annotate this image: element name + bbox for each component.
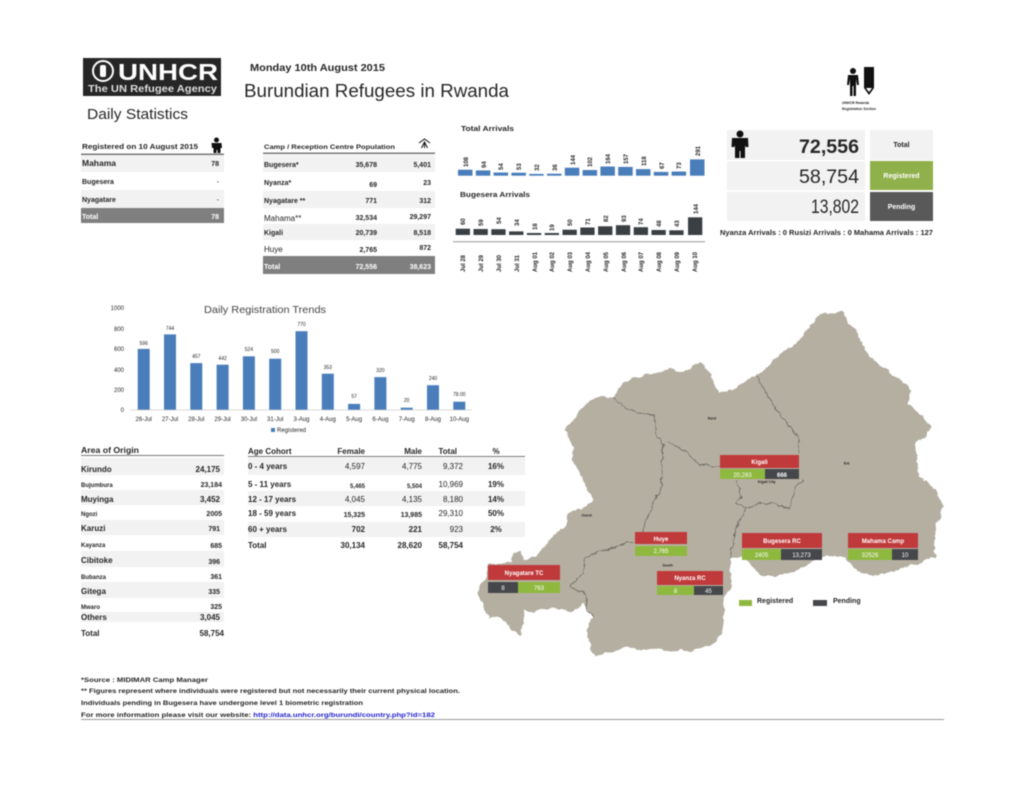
panel: camp population: Mahama** [264,214,301,223]
table: age cohort: Total [248,541,267,550]
map: province labels [581,416,850,567]
chart: bugesera arrivals: 54 [497,217,503,224]
panel: registered on 10 August: 78 [211,214,219,221]
map legend [739,598,861,606]
chart axis with dates: Aug 08 [657,251,663,272]
panel: totals: 58,754 [799,167,859,188]
panel: camp population: 5,401 [413,162,431,169]
chart: total arrivals: 53 [517,163,523,170]
heading: registered table: Registered on 10 August 2015 [82,144,198,151]
title: Burundian Refugees in Rwanda [244,81,510,101]
panel: totals: Pending [888,204,915,211]
table: area of origin: 58,754 [200,629,225,638]
chart: daily registration trends: 7-Aug [399,417,415,423]
table: age cohort: 4,597 [345,462,366,471]
panel: camp population: Huye [264,245,283,254]
table: area of origin: 2005 [206,511,222,518]
map: province labels: Nord [708,416,716,420]
table: area of origin: Bujumbura [81,483,113,489]
table: area of origin: 396 [208,559,220,566]
table: age cohort: 702 [352,525,366,534]
panel: camp population: 38,623 [410,264,431,271]
chart: daily registration trends: 600 [114,347,125,353]
chart: daily registration trends: 240 [429,376,437,382]
chart axis with dates: Jul 29 [479,254,485,272]
footnotes: Individuals pending in Bugesera have undergone level 1 biometric registration [81,701,363,707]
chart axis with dates: Aug 09 [675,251,681,272]
table: age cohort: 19% [488,480,504,489]
chart: daily registration trends [111,304,472,434]
table: age cohort: 58,754 [439,541,464,550]
chart: total arrivals: 108 [464,156,470,167]
chart: total arrivals: 102 [588,156,594,167]
callout: Nyagatare TC: 763 [534,586,545,592]
panel: camp population: 29,297 [410,214,431,221]
table: age cohort: 13,985 [401,512,422,519]
callout: Huye: 2,765 [653,549,669,555]
callout: Kigali: 20,283 [733,473,752,479]
chart axis with dates: Aug 05 [604,251,610,272]
chart: bugesera arrivals: 50 [568,219,574,226]
icon: registration section [842,67,876,111]
panel: registered on 10 August: 78 [211,161,219,168]
table: age cohort [248,447,525,550]
table: area of origin: 685 [210,543,222,550]
footnotes: ** Figures represent where individuals were registered but not necessarily their current physical location. [81,689,460,695]
chart: daily registration trends: 596 [140,341,148,347]
chart: daily registration trends: 500 [271,349,280,355]
chart: daily registration trends: 5-Aug [346,417,362,423]
panel: totals: Registered [883,173,920,180]
table: age cohort: 28,620 [398,541,423,550]
chart axis with dates: Jul 31 [515,254,521,272]
chart: bugesera arrivals: 59 [479,219,485,226]
table: age cohort: 5 - 11 years [248,480,292,489]
panel: camp population: 23 [423,180,431,187]
callout: Nyanza RC: Nyanza RC [674,576,706,582]
panel: camp population: 20,739 [356,230,377,237]
chart: daily registration trends: 0 [121,408,125,414]
table: age cohort: 60 + years [248,525,287,534]
table: area of origin: Bubanza [81,575,107,581]
callout: Kigali: Kigali [751,460,768,466]
chart: daily registration trends: 800 [114,327,125,333]
chart: total arrivals: 54 [499,163,505,170]
chart axis with dates: Jul 30 [497,254,503,272]
callout: Huye: Huye [654,537,669,543]
footnotes: *Source : MIDIMAR Camp Manager [81,678,209,684]
chart: daily registration trends: 27-Jul [162,417,178,423]
table: age cohort: 10,969 [439,480,464,489]
chart axis with dates: Aug 01 [533,251,539,272]
table: age cohort: 15,325 [344,512,365,519]
callout: Huye [635,532,687,556]
table: age cohort: 4,775 [402,462,423,471]
heading: camp table: Camp / Reception Centre Population [264,145,395,151]
chart: total arrivals: 94 [482,161,488,168]
chart: daily registration trends: 26-Jul [136,417,152,423]
chart: bugesera arrivals: 19 [550,224,556,231]
panel: registered on 10 August: Bugesera [82,179,114,186]
panel: camp population: 72,556 [356,264,377,271]
heading: bugesera arrivals: Bugesera Arrivals [460,192,530,199]
panel: registered on 10 August: - [217,179,220,186]
map: province labels: Est [844,462,850,466]
chart: bugesera arrivals: 43 [675,220,681,227]
panel: camp population: Nyagatare ** [264,198,306,205]
chart: bugesera arrivals: 93 [622,215,628,222]
heading: daily registration trends: Daily Registration Trends [204,304,326,316]
callout: Nyagatare TC [488,565,560,593]
chart: daily registration trends: 200 [114,388,125,394]
chart: total arrivals: 32 [535,164,541,171]
chart: bugesera arrivals: 48 [657,220,663,227]
table: age cohort: 4,135 [402,495,423,504]
heading: area of origin: Area of Origin [81,446,139,455]
panel: registered on 10 August: Mahama [82,159,117,168]
panel: camp population [263,139,435,274]
panel: registered on 10 August: - [217,197,220,204]
table: age cohort: 50% [488,509,504,518]
panel: camp population: 69 [369,182,377,189]
table: age cohort: 5,465 [350,484,366,490]
panel: totals: 13,802 [811,197,859,218]
table: age cohort: 16% [488,462,504,471]
table: age cohort: % [492,447,500,456]
table: area of origin: Ngozi [81,512,98,518]
chart: bugesera arrivals: 34 [515,219,521,226]
text: other arrivals: Nyanza Arrivals : 0 Rusizi Arrivals : 0 Mahama Arrivals : 127 [720,230,933,237]
panel: camp population: Bugesera* [264,162,299,169]
panel: totals: Total [893,142,910,149]
table: area of origin: 3,045 [200,613,221,622]
callout: Bugesera RC: 2405 [755,553,769,559]
logo: UNHCR [83,58,221,96]
callout: Nyanza RC: 45 [705,589,712,595]
map: district borders [570,377,803,617]
icon: registration section: UNHCR Rwanda [842,101,869,105]
chart: daily registration trends: 3-Aug [293,417,310,423]
callout: Nyagatare TC: Nyagatare TC [505,571,544,577]
table: area of origin: Mwaro [81,605,100,611]
chart axis with dates: Jul 28 [461,254,467,272]
chart: bugesera arrivals [453,192,705,272]
table: age cohort: Age Cohort [248,447,292,456]
chart: daily registration trends: 320 [376,368,385,374]
chart: bugesera arrivals: 60 [461,218,467,225]
table: age cohort: 221 [409,525,423,534]
map: province labels: Ouest [581,514,593,518]
table: area of origin: Gitega [81,587,106,596]
table: area of origin: 24,175 [196,465,221,474]
callout: Mahama Camp: Mahama Camp [862,539,905,545]
chart axis with dates: Aug 07 [639,251,645,272]
chart: daily registration trends: 8-Aug [425,417,441,423]
table: area of origin: 335 [208,589,220,596]
callout: Bugesera RC: Bugesera RC [763,539,802,545]
table: area of origin: 3,452 [200,495,221,504]
table: area of origin: 23,184 [201,482,222,489]
chart: daily registration trends: 744 [166,326,174,332]
table: age cohort: 8,180 [443,495,464,504]
chart: daily registration trends: 6-Aug [372,417,388,423]
chart: total arrivals: 67 [660,162,666,169]
table: age cohort: Male [404,447,423,456]
table: area of origin: Cibitoke [81,556,113,565]
legend: registered: Registered [277,428,306,434]
icon: person small [212,138,222,153]
chart axis with dates: Aug 04 [586,251,592,272]
chart: total arrivals: 36 [553,164,559,171]
callout: Nyagatare TC: 8 [501,586,505,592]
panel: camp population: 312 [419,198,431,205]
chart: daily registration trends: 524 [245,347,253,353]
callout: Bugesera RC [742,533,822,560]
map legend: Pending [833,598,861,605]
callout: Mahama Camp: 10 [902,553,909,559]
chart: daily registration trends: 20 [404,398,410,404]
panel: camp population: 35,678 [356,162,377,169]
chart: total arrivals: 118 [642,156,648,166]
table: area of origin: Kirundo [81,465,112,474]
chart: daily registration trends: 353 [324,365,332,371]
chart: daily registration trends: 30-Jul [241,417,257,423]
table: area of origin [81,446,225,638]
panel: camp population: Nyanza* [264,180,292,187]
chart: daily registration trends: 28-Jul [188,417,204,423]
table: area of origin: Kayanza [81,543,106,549]
chart: total arrivals: 73 [677,162,683,169]
table: age cohort: Female [337,447,366,456]
chart: daily registration trends: 1000 [111,306,125,312]
chart: total arrivals: 144 [571,154,577,165]
table: area of origin: 791 [208,526,220,533]
chart axis with dates: Aug 03 [568,251,574,272]
chart axis with dates [453,242,705,272]
chart: daily registration trends: 29-Jul [214,417,231,423]
chart: bugesera arrivals: 82 [604,215,610,222]
panel: camp population: 32,534 [356,215,377,222]
panel: registered on 10 August [81,138,224,223]
chart: daily registration trends: 78.00 [453,392,466,398]
chart: total arrivals: 164 [606,153,612,164]
chart: daily registration trends: 442 [218,356,227,362]
map: Rwanda [478,312,943,655]
chart: bugesera arrivals: 71 [586,218,592,225]
callout: Kigali: 666 [777,473,788,479]
icon: person large [732,130,748,158]
chart: daily registration trends: 4-Aug [320,417,336,423]
table: age cohort: 9,372 [443,462,464,471]
chart: daily registration trends: 31-Jul [267,417,283,423]
table: age cohort: 30,134 [341,541,366,550]
logo: UNHCR: The UN Refugee Agency [88,84,217,95]
callout: Bugesera RC: 13,273 [792,553,811,559]
table: age cohort: 14% [488,495,504,504]
chart: total arrivals: 291 [696,145,702,156]
chart: bugesera arrivals: 74 [639,218,645,225]
table: age cohort: Total [438,447,457,456]
table: age cohort: 18 - 59 years [248,509,297,518]
chart: total arrivals: 157 [624,153,630,164]
map legend: Registered [757,598,793,605]
callout: Kigali [720,455,799,479]
map: province labels: South [662,563,673,567]
logo: UNHCR: UNHCR [118,59,218,85]
callout: Mahama Camp: 32526 [862,553,879,559]
table: age cohort: 923 [450,525,464,534]
footnotes [81,678,944,720]
chart: bugesera arrivals: 18 [533,223,539,230]
table: area of origin: 325 [210,604,222,611]
callout: Nyanza RC [657,571,723,595]
callout: Mahama Camp [848,533,918,560]
panel: camp population: Total [264,264,280,271]
panel: totals: 72,556 [799,137,859,158]
date: Monday 10th August 2015 [250,62,385,74]
chart: bugesera arrivals: 144 [694,203,700,214]
panel: camp population: 771 [365,198,377,205]
icon: registration section: Registration Section [842,107,876,111]
chart: daily registration trends: 770 [297,322,306,328]
callout: Nyanza RC: 8 [674,589,678,595]
table: area of origin: Total [81,629,100,638]
map: province labels: Kigali City [758,480,777,484]
chart: daily registration trends: 10-Aug [450,417,469,423]
table: age cohort: 12 - 17 years [248,495,297,504]
chart axis with dates: Aug 06 [622,251,628,272]
panel: registered on 10 August: Total [82,214,98,221]
table: age cohort: 4,045 [345,495,366,504]
chart: daily registration trends: 57 [351,394,357,400]
panel: camp population: 872 [419,245,431,252]
heading: total arrivals: Total Arrivals [461,126,514,133]
chart: daily registration trends: 400 [114,368,125,374]
chart: total arrivals [458,126,704,176]
panel: camp population: Kigali [264,230,283,237]
icon: shelter [419,139,430,148]
table: age cohort: 5,504 [407,484,423,490]
table: age cohort: 29,310 [439,509,464,518]
table: area of origin: Others [81,613,107,622]
chart: daily registration trends: 457 [192,354,201,360]
panel: registered on 10 August: Nyagatare [82,197,116,204]
footnotes: For more information please visit our website: http://data.unhcr.org/burundi/country.php?id=182 [81,713,436,719]
panel: camp population: 2,765 [359,247,377,254]
panel: totals [727,130,933,221]
panel: camp population: 8,518 [413,230,431,237]
table: area of origin: Muyinga [81,495,114,504]
heading: daily statistics: Daily Statistics [87,107,188,123]
chart axis with dates: Aug 02 [550,251,556,272]
table: area of origin: 361 [210,574,222,581]
table: age cohort: 0 - 4 years [248,462,288,471]
table: area of origin: Karuzi [81,524,105,533]
table: age cohort: 2% [490,525,502,534]
chart axis with dates: Aug 10 [693,251,699,272]
